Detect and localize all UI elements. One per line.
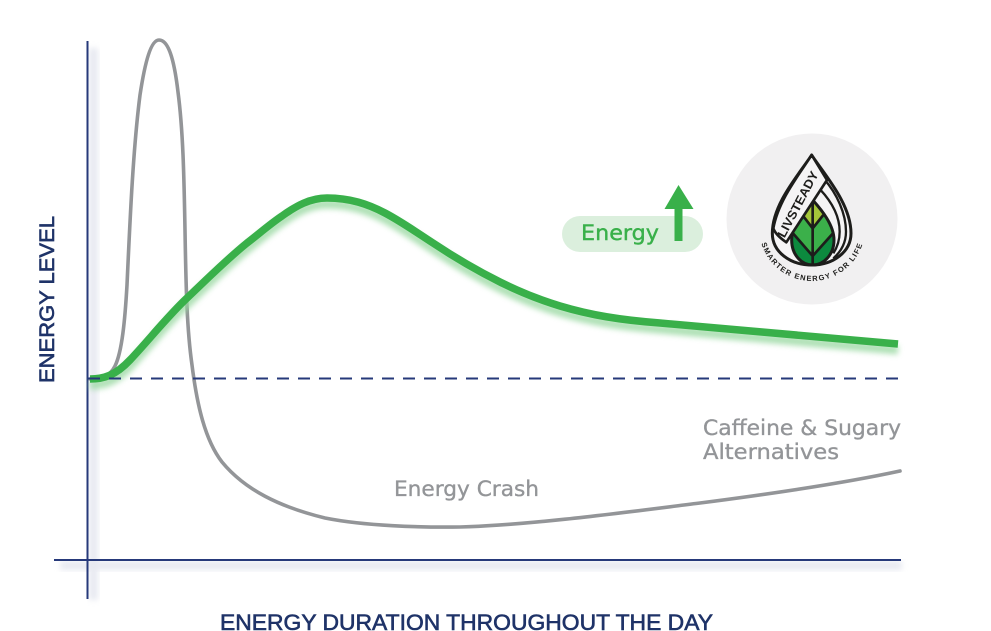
y axis title: ENERGY LEVEL: [36, 216, 59, 383]
logo mark: [772, 155, 851, 267]
icon: up arrow: [664, 185, 694, 241]
logo ribbon: [773, 155, 827, 242]
axis shadows: [60, 48, 902, 600]
baseline dashed line: [88, 378, 900, 380]
energy curve: [90, 198, 898, 379]
drop inner lines: [820, 179, 846, 258]
logo wordmark: LIVSTEADY: [775, 168, 822, 240]
energy curve glow: [90, 204, 898, 385]
caffeine and sugary label: [703, 416, 901, 464]
icon: leaf: [790, 200, 836, 266]
x axis line: [54, 559, 901, 561]
caffeine and sugary alternatives curve: [90, 40, 900, 527]
logo tagline: SMARTER ENERGY FOR LIFE: [762, 242, 862, 282]
energy crash label: Energy Crash: [394, 477, 539, 501]
energy badge: [562, 185, 703, 252]
icon: drop outline: [772, 155, 851, 265]
logo: livsteady: [726, 134, 898, 304]
caffeine and sugary label: Alternatives: [703, 440, 839, 464]
caffeine and sugary label: Caffeine & Sugary: [703, 416, 901, 440]
energy badge: Energy: [581, 221, 659, 245]
y axis line: [86, 41, 88, 599]
